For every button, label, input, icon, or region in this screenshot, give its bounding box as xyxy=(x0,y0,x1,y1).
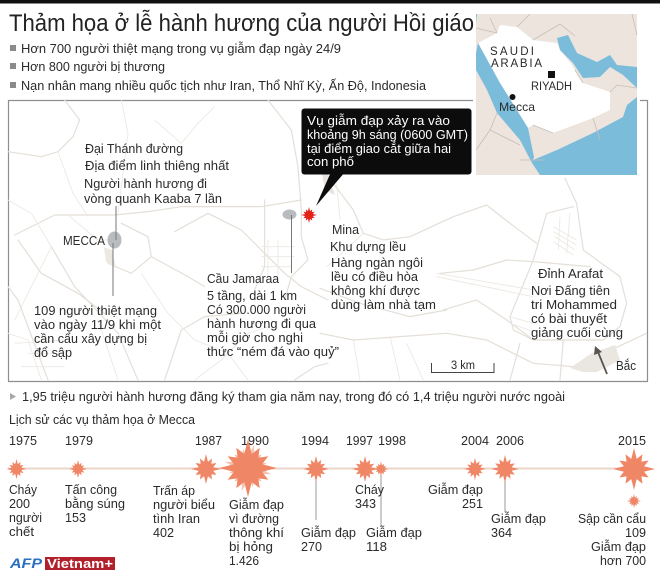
label: Mina: Khu dựng lều xyxy=(330,239,406,254)
event: 1994 xyxy=(301,525,356,554)
Saudi territory xyxy=(478,25,610,133)
year labels: 2015 xyxy=(618,433,646,448)
label: Jamaraa bridge: mỗi giờ cho nghi xyxy=(207,330,303,345)
inset labels: SAUDI xyxy=(490,46,534,58)
logo: AFP Vietnam+: Vietnam+ xyxy=(47,556,113,571)
connector lines xyxy=(316,468,505,527)
timeline xyxy=(6,433,655,568)
label: Mina: không khí được xyxy=(331,283,420,298)
label: Great Mosque: Người hành hương đi xyxy=(84,176,207,191)
event: 1998: Giẫm đạp xyxy=(366,525,422,540)
event: 2015 xyxy=(578,511,646,568)
year labels: 1990 xyxy=(241,433,269,448)
label: crane collapse: đổ sập xyxy=(34,345,72,360)
label: Great Mosque: vòng quanh Kaaba 7 lần xyxy=(84,191,222,206)
timeline heading: Lịch sử các vụ thảm họa ở Mecca xyxy=(9,412,196,427)
label: Mount Arafat: giảng cuối cùng xyxy=(531,325,623,340)
callout: con phố xyxy=(307,154,354,169)
event: 1990: bị hỏng xyxy=(229,539,273,554)
label: crane collapse: cần cẩu xây dựng bị xyxy=(34,331,147,346)
north arrow: Bắc xyxy=(616,358,636,373)
year labels: 2006 xyxy=(496,433,524,448)
event: 1990: 1.426 xyxy=(229,553,259,568)
label: Jamaraa bridge xyxy=(207,271,339,359)
event: 1975: 200 xyxy=(9,496,30,511)
event: 1979: Tấn công xyxy=(65,482,117,497)
event: 2004 xyxy=(428,482,483,511)
logo: AFP Vietnam+: AFP xyxy=(9,555,43,571)
title: Thảm họa ở lễ hành hương của người Hồi giáo xyxy=(9,10,474,37)
inset map: Saudi Arabia xyxy=(474,12,639,176)
road network xyxy=(8,100,647,380)
map panel xyxy=(8,100,648,382)
callout: Vụ giẫm đạp xảy ra vào xyxy=(307,113,450,128)
label: Jamaraa bridge: thức “ném đá vào quỷ” xyxy=(207,344,339,359)
event: 1990: Giẫm đạp xyxy=(229,497,284,512)
event: 1998 xyxy=(366,525,422,554)
year labels: 1998 xyxy=(378,433,406,448)
label: Great Mosque: Đại Thánh đường xyxy=(85,141,183,156)
icon: red incident star xyxy=(301,207,317,223)
event: 2006: Giẫm đạp xyxy=(491,511,546,526)
label: Mount Arafat xyxy=(531,266,623,340)
callout: tại điểm giao cắt giữa hai xyxy=(307,141,451,156)
label: Mount Arafat: Nơi Đấng tiên xyxy=(531,283,610,298)
event: 1987: Trấn áp xyxy=(153,483,195,498)
marker: Jamaraa bridge xyxy=(282,210,296,273)
north arrow xyxy=(594,346,636,374)
event: 1975: chết xyxy=(9,524,34,539)
event: 2015: Giẫm đạp xyxy=(591,539,646,554)
event: 1979: bằng súng xyxy=(65,496,125,511)
label: Mina: dùng làm nhà tạm xyxy=(331,297,436,312)
event: 1997: Cháy xyxy=(355,482,384,497)
callout xyxy=(302,108,472,206)
event: 2006 xyxy=(491,511,546,540)
logo: AFP Vietnam+ xyxy=(9,555,115,571)
event: 1990: thông khí xyxy=(229,525,284,540)
event: 2006: 364 xyxy=(491,525,512,540)
inset map: Saudi Arabia: ARABIA xyxy=(491,58,542,70)
year labels xyxy=(9,433,646,448)
event: 2004: 251 xyxy=(462,496,483,511)
label: Mount Arafat: Đỉnh Arafat xyxy=(538,266,603,281)
year labels: 1979 xyxy=(65,433,93,448)
event: 1997 xyxy=(355,482,384,511)
label: Jamaraa bridge: hành hương đi qua xyxy=(207,316,317,331)
label: Jamaraa bridge: Có 300.000 người xyxy=(207,302,306,317)
event: 1994: Giẫm đạp xyxy=(301,525,356,540)
label: Great Mosque: Địa điểm linh thiêng nhất xyxy=(85,158,229,173)
label: Jamaraa bridge: 5 tầng, dài 1 km xyxy=(207,288,297,303)
event: 2015: hơn 700 xyxy=(600,553,646,568)
marker: Mecca xyxy=(63,206,122,296)
event: 1990: vì đường xyxy=(229,511,279,526)
label: Mina: Hàng ngàn ngôi xyxy=(331,255,423,270)
event: 1975: người xyxy=(9,510,42,525)
label: Mina: Mina xyxy=(332,222,360,237)
event: 1987: 402 xyxy=(153,525,174,540)
event: 1990 xyxy=(229,497,284,568)
event: 1987 xyxy=(153,483,215,540)
seas xyxy=(476,14,637,175)
key facts list: Hơn 800 người bị thương xyxy=(21,59,165,74)
year labels: 1997 xyxy=(346,433,373,448)
event: 2015: 109 xyxy=(625,525,646,540)
label: Great Mosque xyxy=(84,141,229,206)
event: 1979 xyxy=(65,482,125,525)
event: 1975 xyxy=(9,482,42,539)
event: 1987: tình Iran xyxy=(153,511,200,526)
event: 1998: 118 xyxy=(366,539,387,554)
inset map: Saudi Arabia: Mecca xyxy=(499,100,535,114)
key facts list: Hơn 700 người thiệt mạng trong vụ giẫm đạp ngày 24/9 xyxy=(21,41,341,56)
pilgrim note: 1,95 triệu người hành hương đăng ký tham gia năm nay, trong đó có 1,4 triệu người nước ngoài xyxy=(22,389,565,404)
event: 2015: Sập cần cẩu xyxy=(578,511,646,526)
event: 1997: 343 xyxy=(355,496,376,511)
inset map: Saudi Arabia: RIYADH xyxy=(531,81,572,93)
borders xyxy=(476,14,637,160)
year labels: 1987 xyxy=(195,433,222,448)
key facts list: Nạn nhân mang nhiều quốc tịch như Iran, Thổ Nhĩ Kỳ, Ấn Độ, Indonesia xyxy=(21,78,427,93)
label: Mina: lều có điều hòa xyxy=(331,269,419,284)
label: crane collapse: 109 người thiệt mạng xyxy=(34,303,157,318)
year labels: 2004 xyxy=(461,433,489,448)
map frame xyxy=(8,100,648,382)
event: 1994: 270 xyxy=(301,539,322,554)
event: 2004: Giẫm đạp xyxy=(428,482,483,497)
scale bar xyxy=(432,360,494,372)
callout: khoảng 9h sáng (0600 GMT) xyxy=(307,127,468,142)
label: Mount Arafat: có bài thuyết xyxy=(531,311,607,326)
timeline axis xyxy=(8,468,640,470)
scale bar: 3 km xyxy=(451,360,475,372)
label: crane collapse: vào ngày 11/9 khi một xyxy=(34,317,161,332)
year labels: 1994 xyxy=(301,433,329,448)
event: 1979: 153 xyxy=(65,510,86,525)
label: Jamaraa bridge: Cầu Jamaraa xyxy=(207,271,280,286)
year labels: 1975 xyxy=(9,433,37,448)
key facts list xyxy=(10,41,427,93)
label: Mina xyxy=(330,222,436,312)
event stars xyxy=(6,439,655,508)
marker: Mecca: MECCA xyxy=(63,234,106,248)
event: 1987: người biểu xyxy=(153,497,215,512)
label: Mount Arafat: tri Mohammed xyxy=(531,297,617,312)
label: crane collapse xyxy=(34,303,161,360)
event: 1975: Cháy xyxy=(9,482,37,497)
